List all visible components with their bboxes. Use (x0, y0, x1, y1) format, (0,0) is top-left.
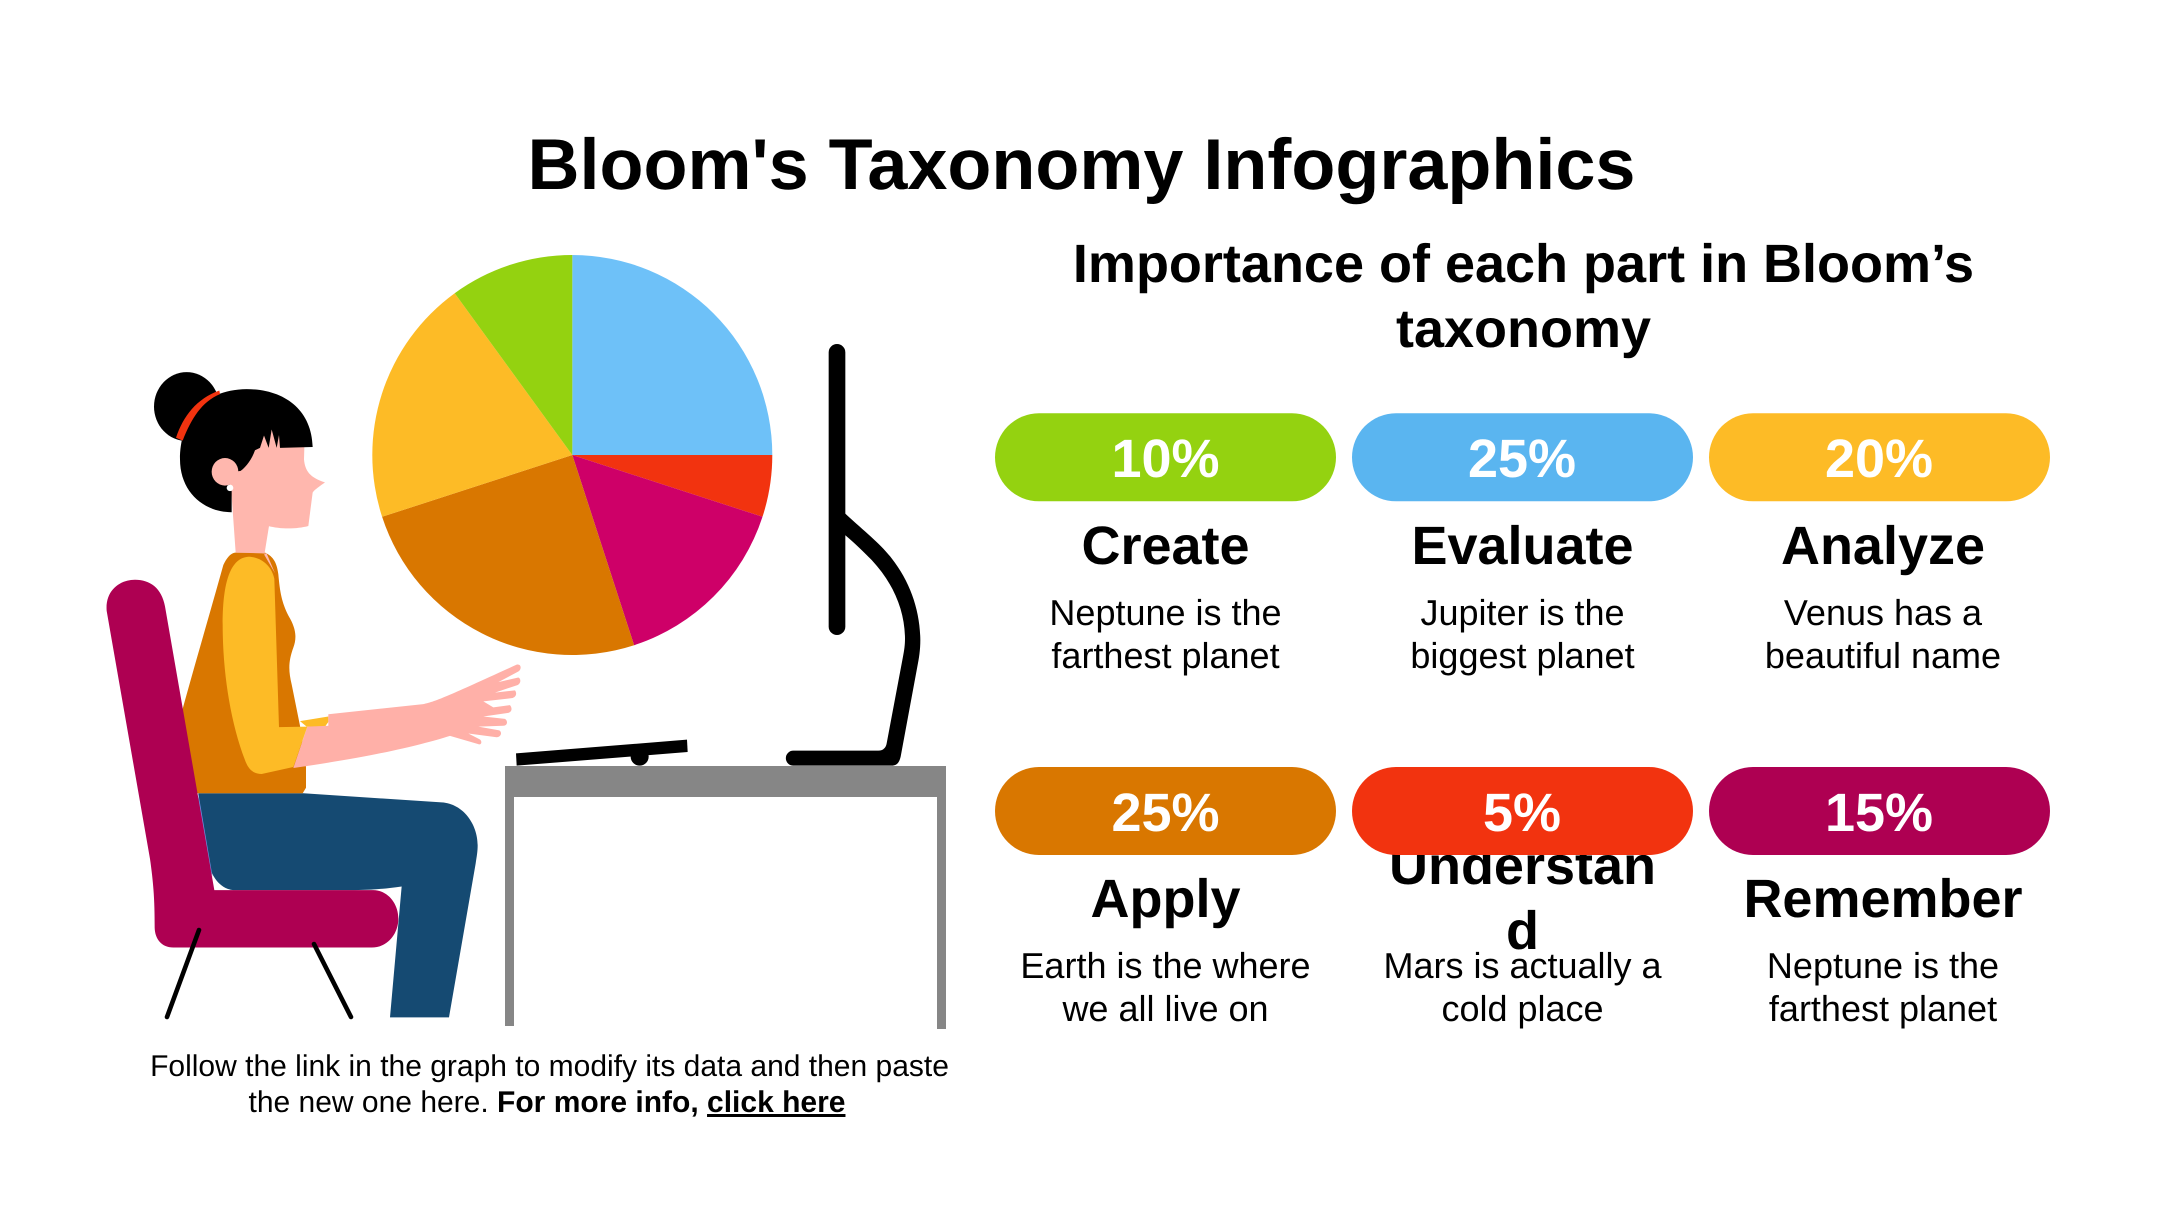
label: remember: Remember (1743, 869, 2023, 929)
description: understand: Mars is actually a (1383, 945, 1663, 986)
card: understand (1352, 767, 1693, 1029)
description: evaluate: Jupiter is the (1420, 592, 1625, 633)
description: evaluate: biggest planet (1410, 635, 1635, 676)
value: 10%: 10% (1111, 429, 1220, 489)
desk (505, 766, 946, 1029)
pill: 15% (1709, 767, 2050, 855)
caption: For more info, click here (497, 1086, 845, 1119)
value: 25%: 25% (1111, 783, 1220, 843)
description: analyze: Venus has a (1784, 592, 1983, 633)
pill: 10% (995, 413, 1336, 501)
card: apply (995, 767, 1336, 1029)
title: Bloom's Taxonomy Infographics (528, 125, 1635, 205)
subtitle: taxonomy (1396, 299, 1651, 359)
pill: 25% (995, 767, 1336, 855)
description: analyze: beautiful name (1765, 635, 2001, 676)
monitor (786, 344, 920, 766)
description: create: farthest planet (1051, 635, 1280, 676)
card: remember (1709, 767, 2050, 1029)
label: apply: Apply (1090, 869, 1241, 929)
value: 5%: 5% (1483, 783, 1561, 843)
subtitle: Importance of each part in Bloom’s (1073, 234, 1974, 294)
card: create (995, 413, 1336, 676)
description: remember: Neptune is the (1767, 945, 1999, 986)
value: 25%: 25% (1468, 429, 1576, 489)
label: understand: Understan (1389, 836, 1656, 896)
pill: 25% (1352, 413, 1693, 501)
card: evaluate (1352, 413, 1693, 676)
description: apply: we all live on (1061, 988, 1269, 1029)
caption: Follow the link in the graph to modify its data and then paste (150, 1050, 949, 1083)
woman sitting on chair (107, 372, 521, 1017)
label: analyze: Analyze (1781, 516, 1985, 576)
label: create: Create (1081, 516, 1250, 576)
caption: the new one here. (249, 1086, 497, 1119)
pill: 20% (1709, 413, 2050, 501)
value: 15%: 15% (1825, 783, 1933, 843)
chair legs (167, 930, 351, 1017)
keyboard (516, 740, 688, 766)
figure and chair body (107, 372, 521, 1017)
pie chart (372, 255, 772, 655)
description: understand: cold place (1441, 988, 1604, 1029)
label: evaluate: Evaluate (1411, 516, 1634, 576)
value: 20%: 20% (1825, 429, 1933, 489)
description: remember: farthest planet (1769, 988, 1997, 1029)
description: create: Neptune is the (1049, 592, 1282, 633)
pill: 5% (1352, 767, 1693, 855)
label: understand: d (1506, 901, 1539, 961)
description: apply: Earth is the where (1020, 945, 1311, 986)
card: analyze (1709, 413, 2050, 676)
